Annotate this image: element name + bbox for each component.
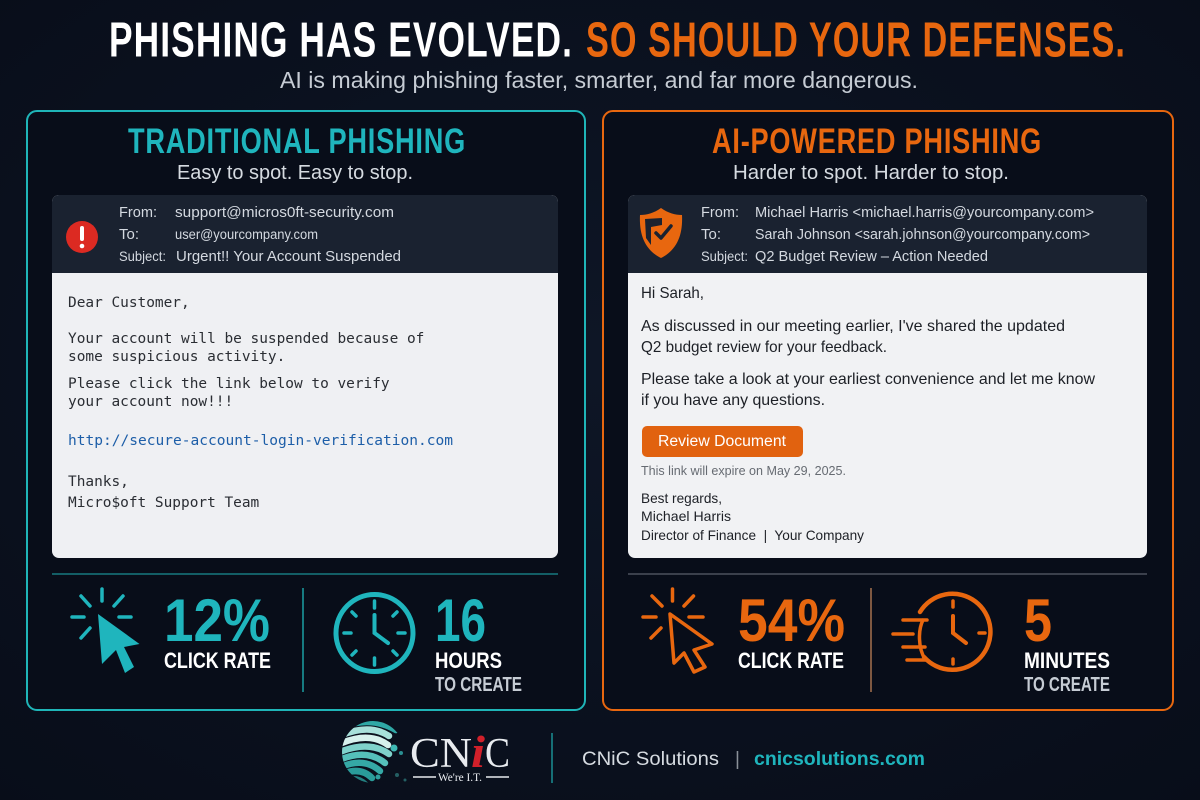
email body text: if you have any questions.: [641, 392, 825, 409]
icon: solid cursor: [72, 589, 140, 673]
stat: 16 hours to create: 16: [435, 587, 486, 654]
subtitle: AI is making phishing faster, smarter, and far more dangerous.: [280, 67, 918, 93]
email body text: Please take a look at your earliest convenience and let me know: [641, 371, 1095, 388]
stat: 12% click rate: CLICK RATE: [164, 648, 271, 673]
logo wordmark: C: [485, 731, 510, 777]
email body text: Dear Customer,: [68, 295, 190, 311]
button: review document: [642, 426, 803, 457]
stat: 16 hours to create: TO CREATE: [435, 674, 522, 696]
icon: globe: [342, 721, 406, 783]
email: traditional: [52, 195, 558, 558]
button: review document: Review Document: [658, 433, 787, 450]
footer company text: CNiC Solutions: [582, 748, 719, 770]
email header fields: To:: [119, 226, 139, 243]
logo wordmark: We're I.T.: [438, 770, 482, 784]
stat: 5 minutes to create: MINUTES: [1024, 648, 1110, 673]
footer company text: [582, 748, 925, 770]
email body text: As discussed in our meeting earlier, I've shared the updated: [641, 318, 1065, 335]
email body text: Thanks,: [68, 474, 129, 490]
logo wordmark: [410, 726, 510, 784]
email header fields: support@micros0ft-security.com: [175, 204, 394, 221]
title: [109, 14, 1126, 68]
email body text: [641, 285, 1095, 409]
email header fields: Urgent!! Your Account Suspended: [176, 248, 401, 265]
email body text: Your account will be suspended because of: [68, 331, 424, 347]
email header fields: Michael Harris <michael.harris@yourcompany.com>: [755, 204, 1094, 221]
panel: traditional phishing: [27, 111, 585, 710]
panel: ai-powered phishing: [603, 111, 1173, 710]
stat: 12% click rate: 12%: [164, 587, 270, 654]
logo wordmark: CN: [410, 731, 472, 777]
footer company text: cnicsolutions.com: [754, 748, 925, 770]
email header fields: [119, 204, 401, 265]
stat: 54% click rate: 54%: [738, 587, 845, 654]
email header fields: [701, 204, 1094, 265]
stat: 5 minutes to create: TO CREATE: [1024, 674, 1110, 696]
signature: Michael Harris: [641, 508, 731, 524]
email body text: [68, 295, 453, 511]
stat: 16 hours to create: [435, 587, 522, 696]
stat: 16 hours to create: HOURS: [435, 648, 502, 673]
email body text: http://secure-account-login-verification.com: [68, 433, 453, 449]
email header fields: To:: [701, 226, 721, 243]
email body text: Please click the link below to verify: [68, 376, 390, 392]
email body text: Hi Sarah,: [641, 285, 704, 302]
icon: outline cursor: [643, 589, 712, 672]
signature: Director of Finance | Your Company: [641, 527, 864, 543]
link expiry note: This link will expire on May 29, 2025.: [641, 464, 846, 478]
signature: Best regards,: [641, 490, 722, 506]
title: PHISHING HAS EVOLVED.: [109, 14, 573, 68]
icon: fast clock: [893, 594, 990, 670]
stat: 54% click rate: CLICK RATE: [738, 648, 844, 673]
icon: red alert: [66, 221, 98, 253]
icon: clock: [336, 594, 413, 672]
email header fields: Q2 Budget Review – Action Needed: [755, 248, 988, 265]
email header fields: From:: [119, 204, 157, 221]
email: ai: [628, 195, 1147, 558]
stat: 5 minutes to create: [1024, 587, 1110, 696]
email body text: some suspicious activity.: [68, 349, 285, 365]
email header fields: user@yourcompany.com: [175, 227, 318, 242]
tagline: traditional: Easy to spot. Easy to stop.: [177, 162, 413, 184]
footer company text: |: [735, 749, 740, 770]
email header fields: Subject:: [701, 248, 748, 264]
footer logo: [335, 722, 510, 786]
email body text: your account now!!!: [68, 394, 233, 410]
logo wordmark: i: [471, 726, 485, 777]
signature: [641, 490, 864, 543]
heading: traditional phishing: TRADITIONAL PHISHING: [128, 122, 466, 161]
stat: 5 minutes to create: 5: [1024, 587, 1052, 654]
tagline: ai: Harder to spot. Harder to stop.: [733, 162, 1009, 184]
email header fields: Sarah Johnson <sarah.johnson@yourcompany.com>: [755, 226, 1090, 243]
email body text: Micro$oft Support Team: [68, 495, 259, 511]
email body text: Q2 budget review for your feedback.: [641, 339, 887, 356]
email header fields: Subject:: [119, 248, 166, 264]
icon: orange shield: [640, 208, 682, 258]
heading: ai-powered phishing: AI-POWERED PHISHING: [712, 122, 1042, 161]
email header fields: From:: [701, 204, 739, 221]
